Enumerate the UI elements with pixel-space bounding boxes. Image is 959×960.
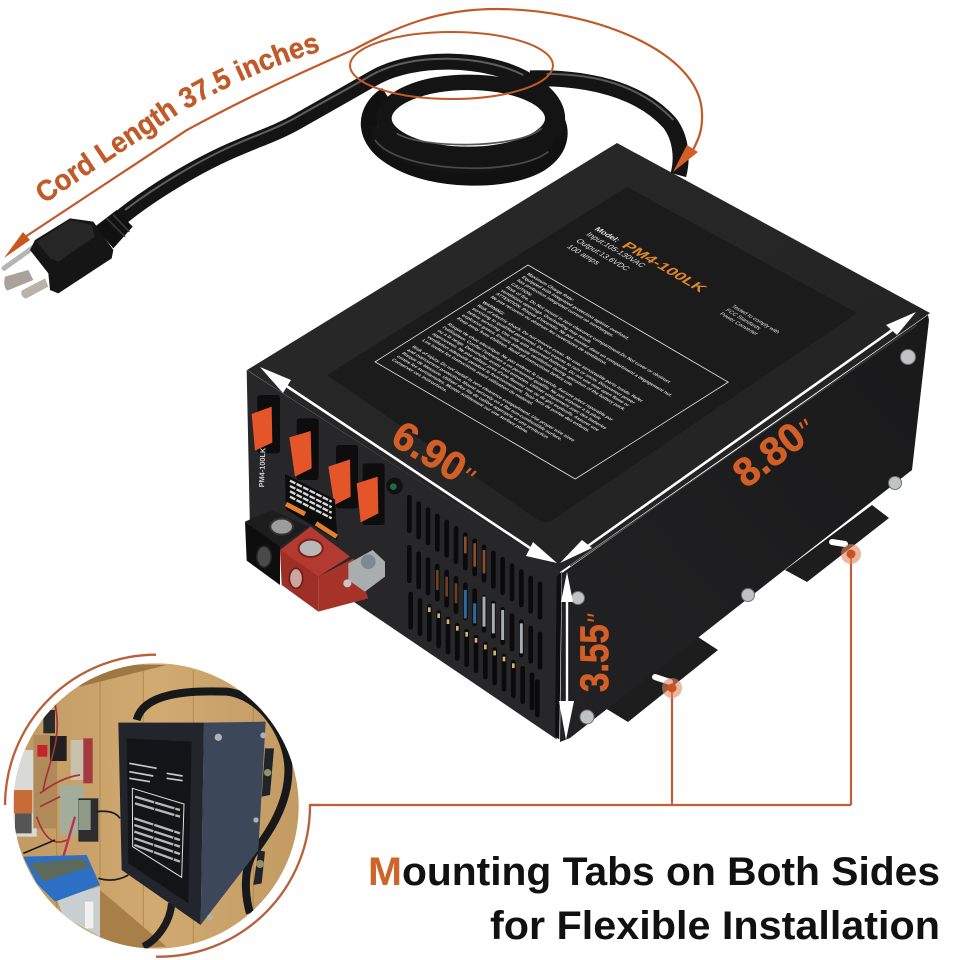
cord length callout bbox=[4, 8, 704, 258]
warning text box: explosive gases. Ensure adequate ventilation during operation of the battery pack. bbox=[460, 313, 627, 412]
model and rating text: Power Converter bbox=[718, 312, 759, 337]
internal components seen through slots bbox=[465, 537, 484, 573]
warning text box: WARNING: bbox=[480, 301, 507, 317]
cord length ellipse bbox=[350, 32, 553, 99]
warning text box: CAUTION: bbox=[509, 282, 534, 298]
black terminal bbox=[245, 510, 308, 585]
model and rating text: 100 amps bbox=[564, 243, 602, 266]
mounting tab front bbox=[605, 637, 718, 722]
power LED bbox=[386, 478, 403, 494]
circular installation photo bbox=[5, 655, 320, 957]
warning text box: Lire toutes les instructions avant utilisation du materiel. bbox=[420, 339, 535, 406]
cord length text: Cord Length 37.5 inches bbox=[36, 38, 319, 200]
photo arcs bbox=[5, 655, 320, 957]
warning text box: Maximum Charge Rate: bbox=[525, 272, 576, 303]
headline bbox=[368, 850, 940, 948]
edge highlight bbox=[570, 325, 917, 566]
dimension label: 3.55: 3.55'' bbox=[572, 613, 617, 692]
warning text box: l'utilisateur. Confier l'entretien a un personnel qualifie. Ne pas exposer a la pluie bbox=[440, 326, 603, 421]
fuse holders bbox=[257, 395, 385, 525]
warning text box: ventilation adequate pendant le fonctionnement. Tenir hors de portee des enfants. bbox=[425, 335, 592, 433]
arrow: length bbox=[560, 312, 916, 563]
converter box bbox=[245, 143, 930, 742]
label panel on top face bbox=[327, 187, 857, 522]
arrow: height bbox=[559, 572, 574, 740]
warning text box: Risk of fire. Do Not mount in zero clearance compartment.Do Not cover or obstruct bbox=[504, 286, 672, 384]
warning text box: has protection integrated current no surcharges. bbox=[515, 279, 616, 338]
side screws bbox=[572, 350, 916, 724]
model and rating text: Model: bbox=[592, 226, 622, 244]
warning text box: Risk of injury. Do not install in zero clearance compartment. Use proper wire sizes bbox=[410, 345, 577, 443]
warning text box: ATTENTION: Risque d'incendie. Ne pas monter dans un compartiment a degagement nul. bbox=[493, 292, 674, 398]
warning text box: Risque de blessure. Utiliser des fils de calibre approprie et une protection bbox=[400, 351, 550, 440]
red terminal bbox=[280, 527, 368, 612]
model and rating text: PM4-100LK bbox=[618, 239, 711, 294]
model and rating text: Output:13.6VDC bbox=[574, 238, 632, 272]
ventilation slots bbox=[409, 497, 540, 715]
headline line 2: for Flexible Installation bbox=[490, 904, 940, 948]
arrowhead left bbox=[4, 232, 30, 258]
cord length curve bbox=[25, 9, 702, 237]
plug bbox=[4, 210, 133, 299]
model and rating text bbox=[564, 223, 785, 354]
warning text box: ou a la neige. Debrancher avant tout entretien. Utiliser uniquement avec des batteries bbox=[435, 329, 608, 431]
warning text box: Ne pas recouvrir ou obstruer les ouvertures de ventilation. bbox=[488, 295, 609, 366]
arrowhead right bbox=[673, 145, 698, 172]
model and rating text: Input:105-130VAC bbox=[584, 231, 648, 269]
model and rating text: FCC Standards bbox=[724, 308, 762, 331]
model and rating text: Tested to comply with bbox=[729, 305, 781, 335]
top face bbox=[247, 143, 930, 572]
right side face bbox=[560, 315, 929, 742]
warning text box: before servicing. Use only with approved batteries. Do not use near open flame or bbox=[465, 310, 631, 408]
front panel with fuses, terminals and vents bbox=[245, 370, 562, 739]
warning text box: and overcurrent protection. Mount securely on a flat non-combustible surface. bbox=[405, 348, 564, 442]
wood wall bbox=[10, 660, 303, 953]
warning text box: servicing to qualified personnel. Do not expose to rain or snow. Disconnect power bbox=[470, 307, 637, 405]
side model text: PM4-100LK bbox=[257, 447, 267, 487]
power cord with plug bbox=[4, 59, 681, 299]
warning text box: Risque de choc electrique. Ne pas enlever le couvercle. Aucune piece reparable par bbox=[445, 323, 615, 422]
dimension label: 8.80: 8.80'' bbox=[725, 407, 824, 496]
arrow: width bbox=[260, 367, 557, 563]
lug bolt bbox=[343, 550, 385, 592]
warning sticker bbox=[285, 474, 337, 541]
converter mounted on wall bbox=[118, 722, 274, 925]
orange fuses bbox=[252, 407, 378, 522]
cord and coil bbox=[118, 59, 681, 220]
warning text box: Conserver ces instructions. bbox=[390, 358, 449, 393]
warning text box bbox=[375, 265, 728, 479]
warning text box: Keep away from children. Read all instructions before use. bbox=[455, 317, 575, 387]
headline line 1: Mounting Tabs on Both Sides bbox=[368, 850, 940, 894]
leader lines from tabs to photo bbox=[310, 544, 861, 805]
dimension label: 6.90: 6.90'' bbox=[384, 413, 485, 497]
warning text box: Equipped with integrated protection against overload, bbox=[520, 275, 631, 341]
warning text box: Risk of electric shock. Do not remove cover. No user serviceable parts inside. Refer bbox=[475, 304, 645, 403]
mounting tab rear bbox=[785, 505, 889, 582]
white dimension arrows bbox=[260, 312, 916, 740]
warning text box: approuvees. Ne pas utiliser pres d'une flamme nue ou de gaz explosifs. Assurer une bbox=[430, 332, 601, 432]
battery bbox=[23, 855, 100, 937]
warning text box: ventilation openings. Overloading may result. bbox=[499, 289, 593, 345]
cables bbox=[137, 691, 288, 913]
window and wiring bbox=[14, 704, 129, 881]
warning text box: contre les surintensites. Monter solidement sur une surface plane. bbox=[395, 355, 530, 434]
